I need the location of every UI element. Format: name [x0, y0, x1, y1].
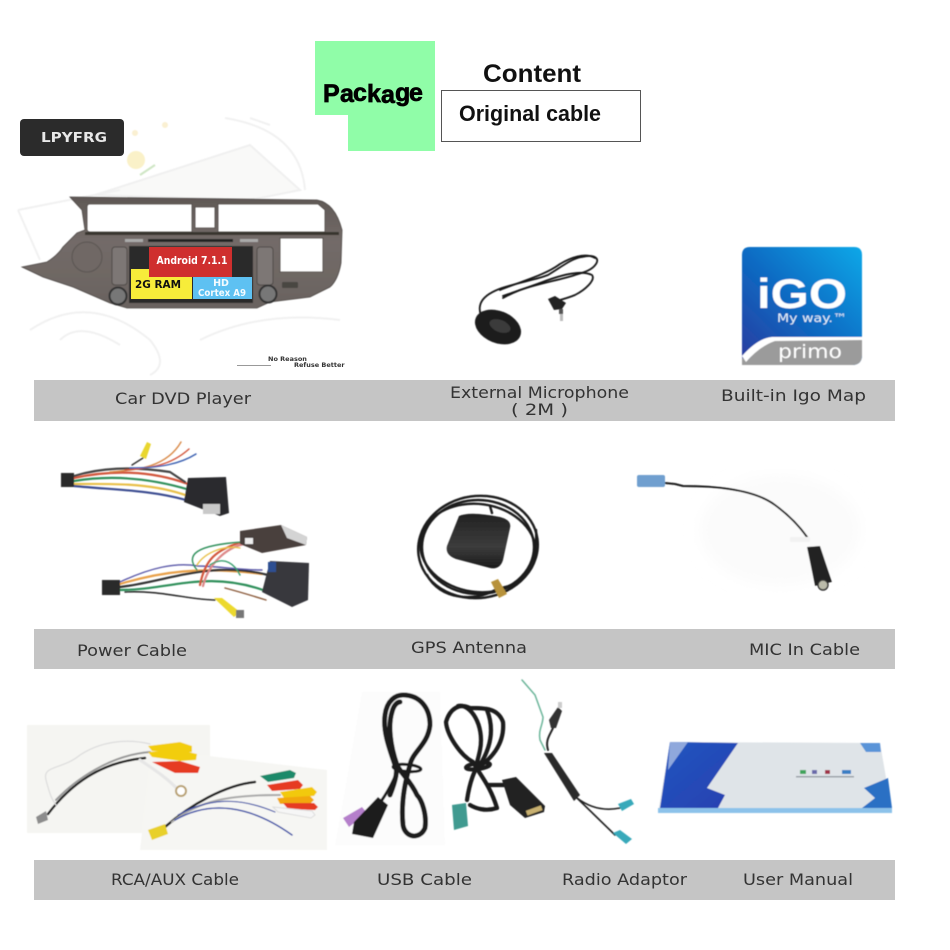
- display: [129, 246, 253, 303]
- tagline: Refuse Better: [294, 361, 345, 369]
- spec tile: cortex: [193, 277, 252, 299]
- dashboard bezel: [22, 197, 342, 308]
- spec tile: ram: [131, 269, 192, 299]
- label: gps antenna: GPS Antenna: [411, 638, 527, 657]
- package badge: [315, 41, 435, 151]
- label: mic in cable: MIC In Cable: [749, 640, 860, 659]
- spec tile: cortex: HD: [213, 278, 229, 289]
- spec tile: android: [149, 247, 232, 277]
- icon: igo primo map: [742, 247, 862, 365]
- tagline: No Reason: [268, 355, 307, 363]
- original cable box: Original cable: [459, 101, 601, 126]
- label: built-in igo map: Built-in Igo Map: [721, 386, 866, 405]
- brand badge: [20, 119, 124, 156]
- package badge: Package: [323, 79, 423, 109]
- label: external microphone: [450, 383, 629, 419]
- row 3 label bar: [34, 860, 895, 900]
- label: user manual: User Manual: [743, 870, 853, 889]
- faint background illustration: [18, 118, 340, 375]
- icon: usb cable: [335, 692, 545, 845]
- row 1 label bar: [34, 380, 895, 421]
- label: power cable: Power Cable: [77, 641, 187, 660]
- label: radio adaptor: Radio Adaptor: [562, 870, 687, 889]
- icon: igo primo map: My way.™: [777, 311, 847, 325]
- label: car dvd player: Car DVD Player: [115, 389, 251, 408]
- left rca cable: [45, 741, 180, 814]
- label: rca aux cable: RCA/AUX Cable: [111, 870, 239, 889]
- icon: mic in cable: [637, 475, 860, 590]
- right rca cable: [165, 782, 292, 835]
- icon: user manual: [658, 742, 892, 813]
- row 2 label bar: [34, 629, 895, 669]
- label: external microphone: ( 2M ): [511, 400, 568, 419]
- icon: gps antenna: [411, 488, 545, 606]
- icon: external microphone: [470, 256, 597, 351]
- tagline: [237, 355, 345, 369]
- heading: content: Content: [483, 60, 582, 88]
- upper harness: [74, 442, 196, 500]
- product photo: car dvd player: [18, 118, 345, 375]
- spec tile: cortex: Cortex A9: [198, 288, 246, 299]
- icon: igo primo map: iGO: [757, 270, 847, 317]
- label: external microphone: External Microphone: [450, 383, 629, 402]
- icon: power cable harness: [61, 442, 309, 618]
- usb extension: [446, 706, 506, 810]
- spec tile: android: Android 7.1.1: [156, 255, 228, 267]
- icon: radio adaptor: [522, 680, 634, 844]
- icon: igo primo map: primo: [778, 341, 842, 363]
- label: usb cable: USB Cable: [377, 870, 472, 889]
- spec tile: ram: 2G RAM: [135, 278, 181, 291]
- brand badge: LPYFRG: [41, 130, 107, 146]
- icon: rca aux cables: [27, 725, 327, 850]
- original cable box: [442, 90, 640, 142]
- lower harness: [120, 542, 268, 600]
